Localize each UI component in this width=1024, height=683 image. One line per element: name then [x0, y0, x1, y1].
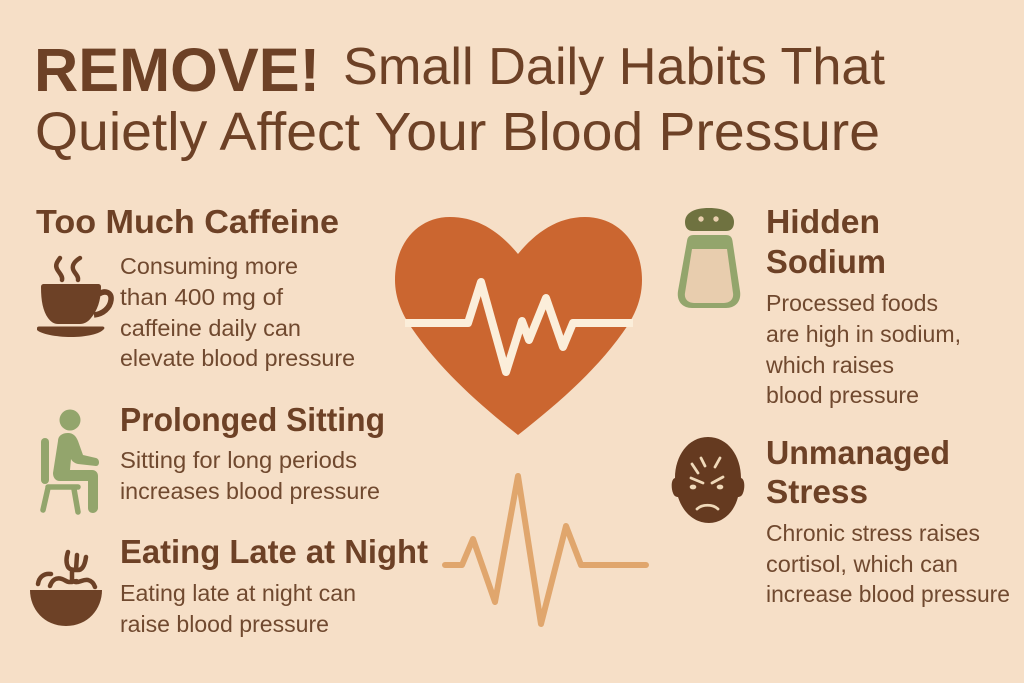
text: sodium description: are high in sodium,	[766, 321, 961, 347]
chart: pulse line	[445, 476, 646, 624]
text: eating description: raise blood pressure	[120, 611, 329, 637]
heading: unmanaged stress	[766, 434, 950, 510]
text: sodium description: which raises	[765, 352, 894, 378]
panel: too much caffeine	[36, 203, 355, 371]
icon: noodle bowl with fork	[30, 552, 102, 626]
panel: unmanaged stress	[672, 434, 1010, 607]
heading: unmanaged stress: Unmanaged	[766, 434, 950, 471]
panel: hidden sodium	[678, 203, 961, 408]
title	[34, 36, 886, 162]
text: caffeine description: Consuming more	[120, 253, 298, 279]
heading: hidden sodium: Hidden	[766, 203, 880, 240]
text: stress description: Chronic stress raises	[766, 520, 980, 546]
title: Small Daily Habits That	[343, 38, 886, 96]
text: sitting description	[120, 447, 380, 504]
text: caffeine description: than 400 mg of	[120, 284, 283, 310]
text: sodium description: Processed foods	[766, 290, 938, 316]
heading: unmanaged stress: Stress	[766, 473, 868, 510]
icon: seated person	[43, 410, 99, 513]
text: eating description: Eating late at night can	[120, 580, 356, 606]
text: eating description	[120, 580, 356, 637]
text: stress description: increase blood pressure	[766, 581, 1010, 607]
text: caffeine description: caffeine daily can	[120, 315, 301, 341]
icon: heart with pulse line	[395, 217, 642, 435]
text: caffeine description: elevate blood pressure	[120, 345, 355, 371]
text: stress description: cortisol, which can	[766, 551, 958, 577]
icon: stressed face	[672, 437, 744, 523]
text: caffeine description	[120, 253, 355, 371]
icon: coffee cup	[37, 258, 111, 337]
title: Quietly Affect Your Blood Pressure	[35, 102, 880, 162]
icon: salt shaker	[678, 208, 740, 308]
heading: eating late at night: Eating Late at Night	[120, 533, 428, 570]
text: sitting description: increases blood pressure	[120, 478, 380, 504]
panel: eating late at night	[30, 533, 428, 637]
heading: hidden sodium	[766, 203, 886, 280]
panel: prolonged sitting	[43, 401, 385, 513]
text: sitting description: Sitting for long periods	[120, 447, 357, 473]
heading: prolonged sitting: Prolonged Sitting	[120, 401, 385, 438]
text: stress description	[766, 520, 1010, 607]
heading: hidden sodium: Sodium	[766, 243, 886, 280]
text: sodium description: blood pressure	[766, 382, 919, 408]
text: sodium description	[765, 290, 961, 408]
title: REMOVE!	[34, 36, 320, 104]
heading: too much caffeine: Too Much Caffeine	[36, 203, 339, 240]
